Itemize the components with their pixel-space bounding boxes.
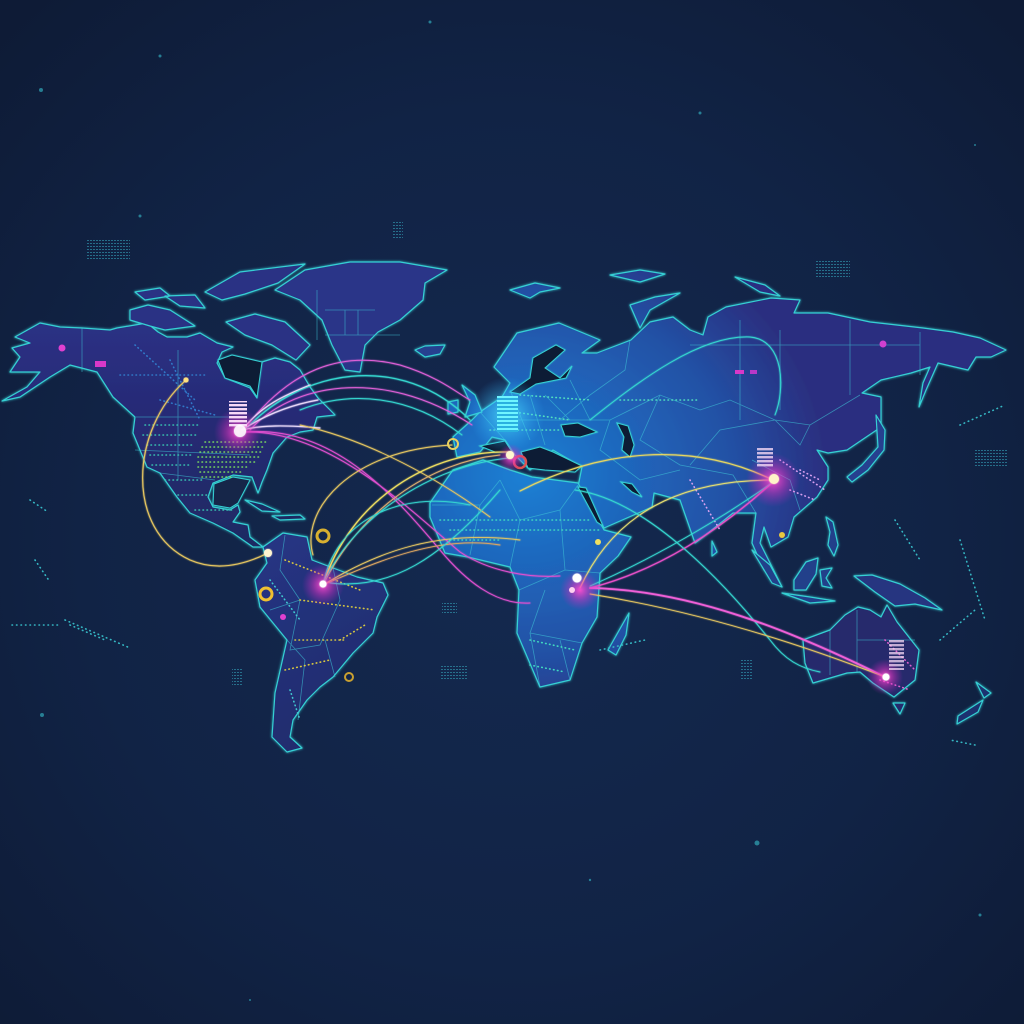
Africa — [430, 460, 631, 687]
Europe panel backing — [497, 396, 518, 432]
arc: Middle East to Australia — [575, 490, 820, 672]
Caribbean islands — [245, 500, 305, 520]
New Zealand — [957, 682, 991, 724]
hub: China — [746, 447, 800, 507]
arc: Canada to Colombia — [143, 380, 268, 566]
British Isles — [448, 385, 482, 417]
arcs: Africa to Australia — [590, 588, 885, 677]
Iceland — [415, 345, 445, 357]
hub: East Africa — [560, 570, 600, 610]
icon: China data bars — [757, 447, 773, 467]
Australia — [803, 605, 919, 697]
hub: Australia — [867, 640, 904, 695]
Tasmania — [893, 703, 905, 714]
endpoint: Iberia — [448, 439, 458, 449]
Canadian Arctic islands — [130, 264, 310, 360]
arc: Asia northern loop — [590, 337, 781, 420]
arcs: USA to Africa — [245, 431, 530, 603]
Pacific and other island dots — [12, 405, 1005, 745]
hub: Europe — [469, 377, 545, 472]
icon: Australia data bars — [889, 640, 904, 670]
Eurasia — [453, 298, 1006, 587]
Sulawesi — [820, 568, 832, 588]
Sri Lanka — [712, 541, 717, 556]
Madagascar — [608, 613, 629, 655]
hub: USA — [214, 401, 262, 456]
icon: USA data bars — [229, 401, 247, 427]
hub: Brazil — [302, 564, 344, 606]
Greenland — [275, 262, 447, 372]
New Guinea — [854, 575, 942, 610]
South America — [255, 533, 388, 752]
arcs: Brazil fan — [311, 445, 452, 555]
Arctic Eurasian islands — [510, 270, 780, 328]
arcs: bright fan from USA hub — [242, 385, 320, 430]
connection arcs — [143, 337, 885, 677]
data panels — [87, 222, 1008, 687]
city light stipple — [120, 345, 915, 720]
arcs: China — [520, 455, 773, 491]
Philippines — [826, 517, 838, 556]
arcs: USA to Europe — [245, 376, 470, 430]
North America — [2, 323, 335, 547]
Japan — [847, 415, 885, 482]
endpoint: Colombia — [264, 549, 272, 557]
Borneo — [794, 558, 818, 590]
inland seas — [213, 345, 642, 526]
minor glow spots — [58, 340, 886, 681]
Sumatra and Java — [752, 550, 835, 603]
world map landmasses — [2, 262, 1006, 752]
icon: Europe data bars — [497, 396, 518, 432]
endpoint: Canada — [184, 378, 188, 382]
country borders — [82, 290, 920, 720]
